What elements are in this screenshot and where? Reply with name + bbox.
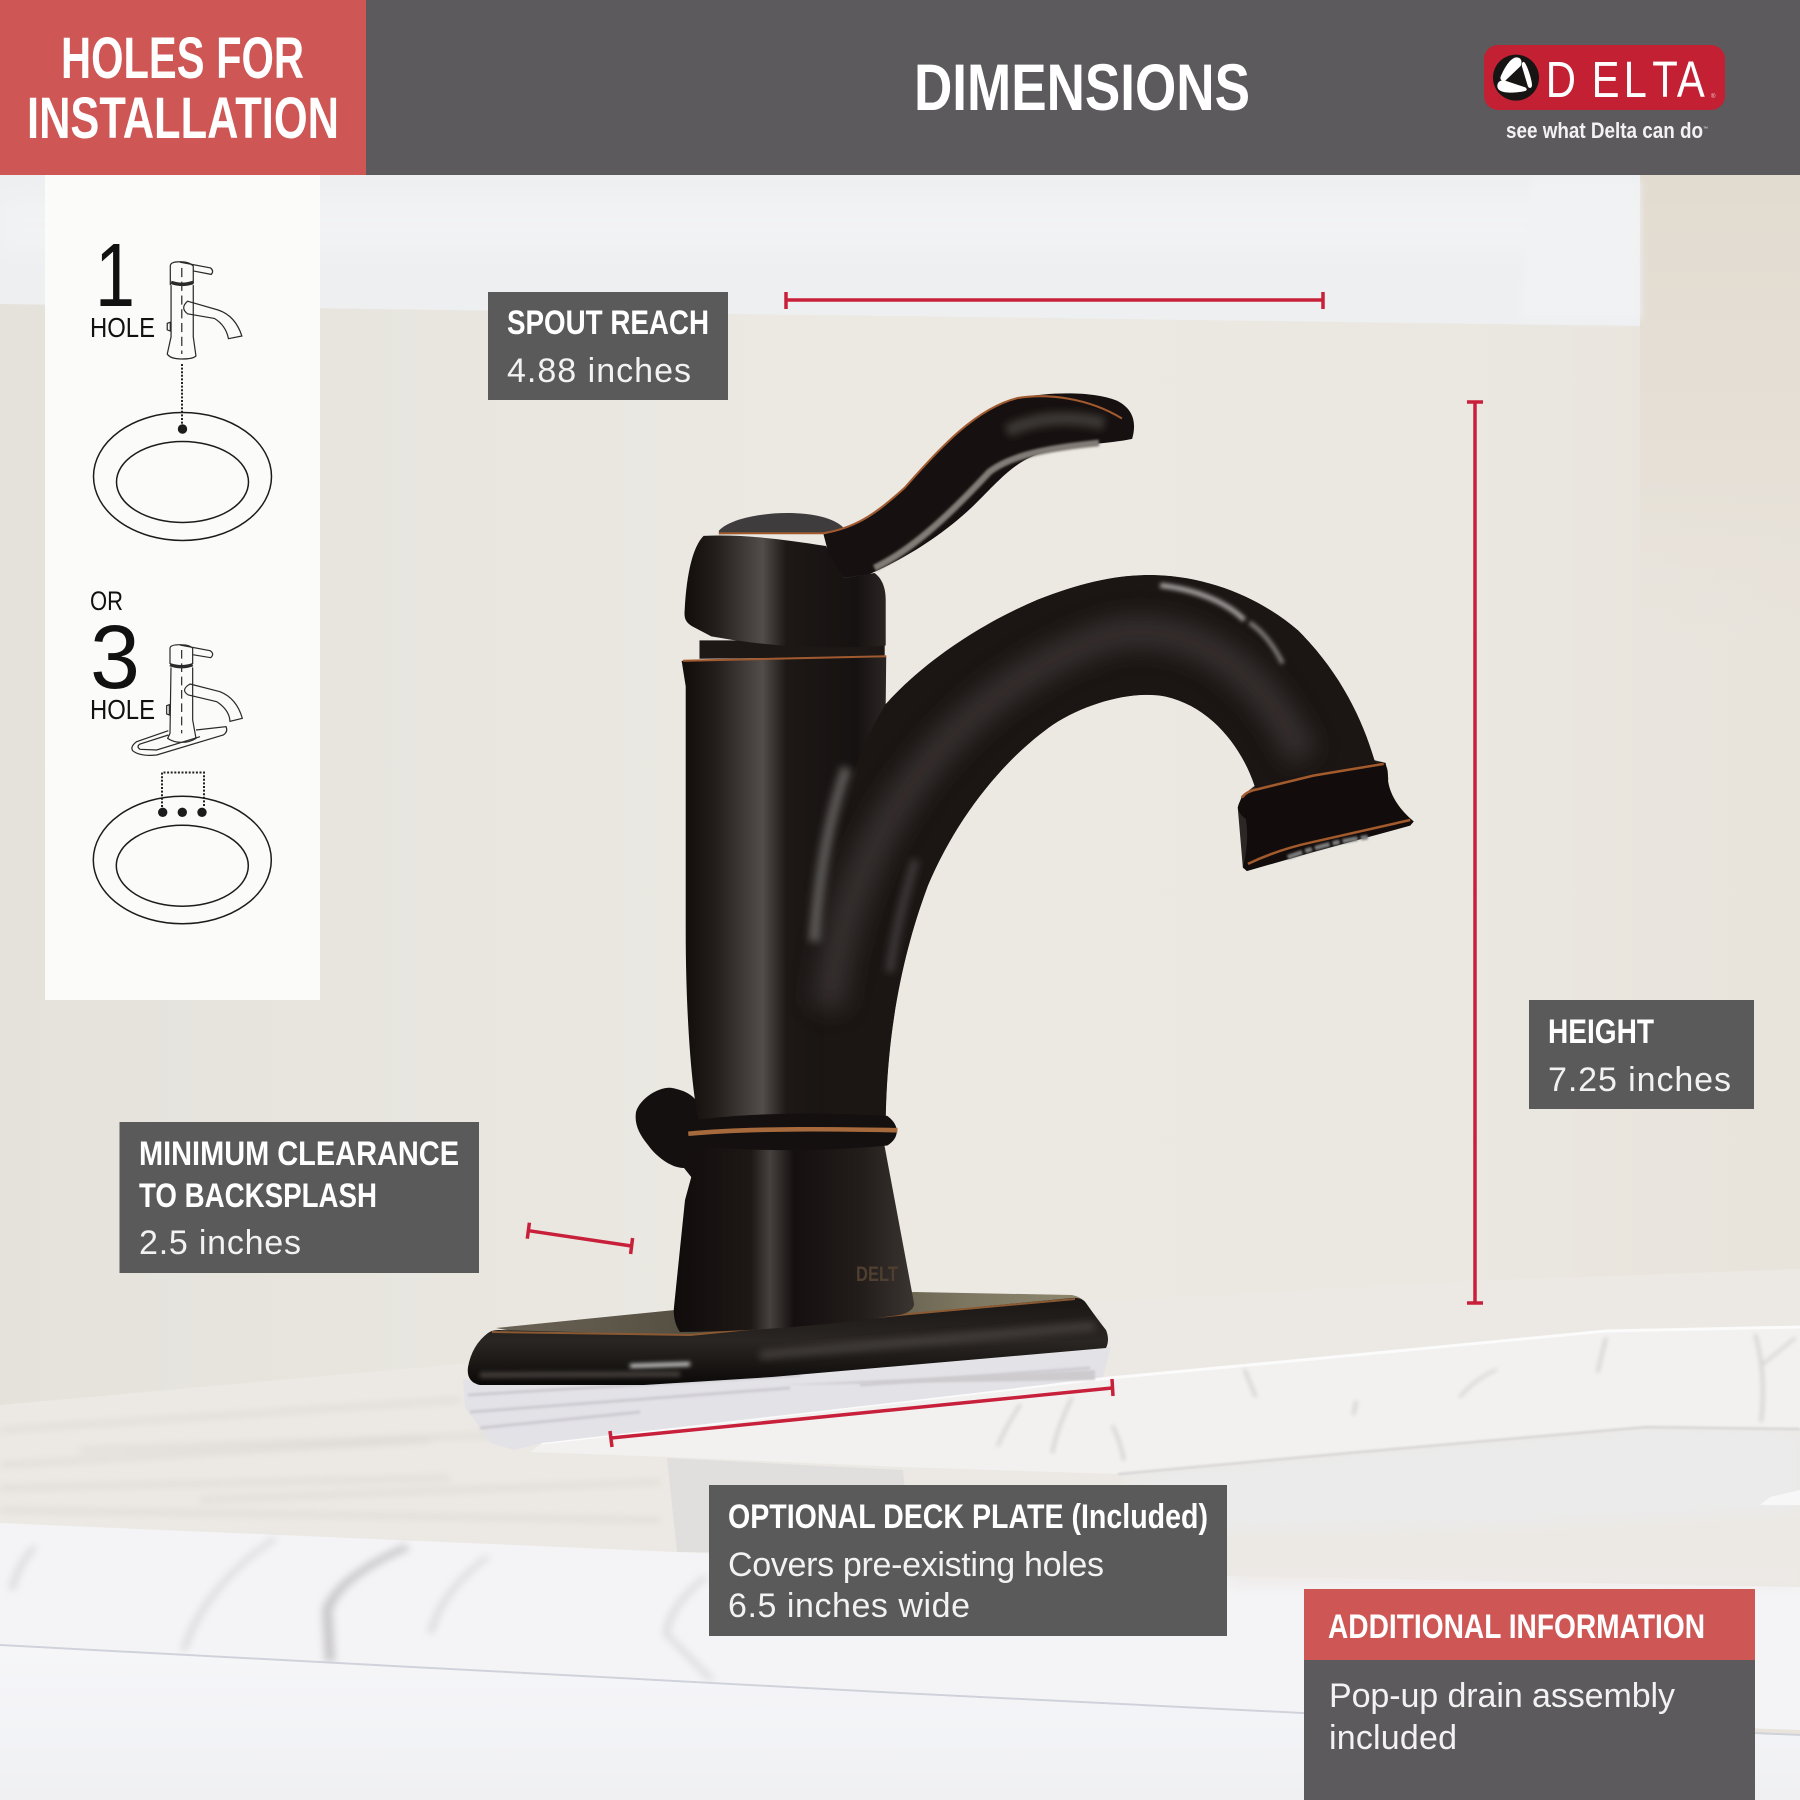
handle head [684,535,886,648]
option: 3 hole: HOLE [90,694,155,725]
callout: additional information [1304,1589,1755,1800]
neck ring [699,640,885,659]
brand logo [1484,45,1725,143]
sink bowl [1118,1427,1800,1530]
option: 3 hole [90,586,271,924]
callout: spout reach [488,292,728,400]
dimension line: deck plate [610,1379,1113,1447]
callout: spout reach: 4.88 inches [507,352,691,390]
callout: height [1529,1000,1754,1109]
panel: hole options [45,175,320,1000]
brand logo: ® [1711,93,1716,100]
icon: sink with one hole [94,412,272,540]
brand logo: see what Delta can do [1506,118,1703,143]
callout: optional deck plate [709,1485,1227,1636]
header: holes for installation: INSTALLATION [27,86,339,151]
counter surface [0,1269,1800,1600]
header: holes for installation [0,0,366,175]
faucet body and spout [682,575,1388,1120]
title: DIMENSIONS [914,50,1250,124]
callout: height: 7.25 inches [1548,1061,1731,1099]
callout: additional information: ADDITIONAL INFORMATION [1328,1608,1705,1646]
callout: optional deck plate: 6.5 inches wide [728,1587,970,1625]
header: holes for installation: HOLES FOR [61,26,304,91]
callout: additional information: Pop-up drain assembly [1329,1677,1675,1715]
lower cabinet [0,1646,1800,1800]
lever [823,393,1134,578]
aerator collar [1238,762,1414,871]
connector: dotted bracket [162,772,204,807]
option: 1 hole: 1 [95,226,135,326]
copper edges [683,396,1122,661]
marble front edge [0,1523,1800,1730]
header bar [0,0,1800,175]
callout: spout reach: SPOUT REACH [507,304,709,342]
lower body [674,1143,914,1332]
logo mark on base: DELT [856,1263,898,1286]
dimension line: spout reach [786,292,1324,309]
callout: height: HEIGHT [1548,1013,1654,1051]
deck plate [468,1292,1108,1385]
option: 1 hole [90,226,272,540]
option: 1 hole: HOLE [90,312,155,343]
icon: faucet with deck plate [132,645,242,755]
option: 3 hole: OR [90,586,123,616]
option: 3 hole: 3 [90,608,140,708]
callout: optional deck plate: OPTIONAL DECK PLATE (Included) [728,1498,1208,1536]
connector: dotted [181,364,183,425]
icon: sink with three holes [93,796,271,924]
spout base tone [874,575,1376,1116]
cap dome [719,513,844,534]
collar ring [687,1114,897,1150]
gasket reflection [463,1347,1111,1450]
callout: minimum clearance: TO BACKSPLASH [139,1177,377,1215]
pop-up knob [636,1088,700,1178]
brand logo: ™ [1703,126,1708,132]
callout: minimum clearance: MINIMUM CLEARANCE [139,1135,459,1173]
marble rim [530,1327,1800,1474]
callout: additional information: included [1329,1719,1457,1757]
callout: minimum clearance: 2.5 inches [139,1224,301,1262]
callout: optional deck plate: Covers pre-existing holes [728,1546,1104,1584]
dimension line: height [1467,402,1483,1304]
faucet photo illustration [468,393,1414,1385]
icon: single-hole faucet [167,262,242,359]
callout: minimum clearance [120,1122,479,1273]
dimension line: clearance [527,1223,633,1254]
brand logo: DELTA [1546,51,1705,108]
